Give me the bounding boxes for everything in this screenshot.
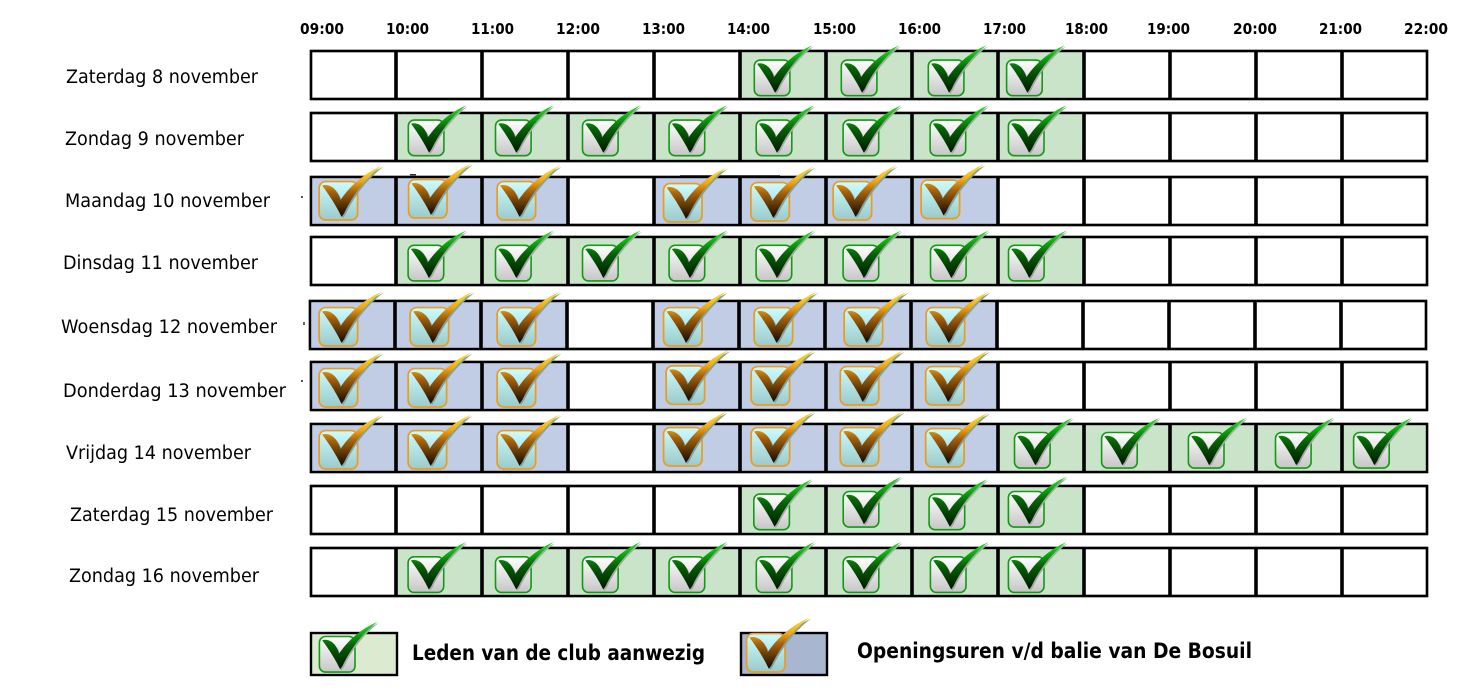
check icons: [319, 292, 990, 346]
hour axis labels: 14:00: [727, 20, 770, 38]
row: Zondag 9 november: [65, 105, 1427, 162]
check icons: [319, 412, 1413, 469]
hour axis labels: 21:00: [1319, 20, 1362, 38]
row: Dinsdag 11 november: [63, 230, 1427, 286]
legend: desk opening hours: [741, 618, 1252, 675]
hour axis labels: 20:00: [1233, 20, 1277, 38]
hour axis labels: 12:00: [556, 20, 600, 38]
row: Woensdag 12 november: Woensdag 12 november: [61, 317, 277, 338]
hour axis labels: 18:00: [1065, 20, 1108, 38]
row: Zondag 16 november: [69, 542, 1427, 597]
row: Woensdag 12 november: [61, 292, 1426, 350]
check icons: [319, 164, 985, 222]
legend: desk opening hours: Openingsuren v/d balie van De Bosuil: [857, 639, 1252, 663]
hour axis labels: 17:00: [983, 20, 1026, 38]
check icons: [319, 350, 990, 407]
row: Donderdag 13 november: [63, 350, 1427, 411]
hour axis labels: 13:00: [642, 20, 685, 38]
check icons: [754, 45, 1066, 96]
row: Maandag 10 november: [65, 164, 1427, 226]
hour axis labels: 11:00: [471, 20, 514, 38]
row: Zaterdag 15 november: [70, 477, 1427, 535]
hour axis labels: 16:00: [898, 20, 941, 38]
row: Zaterdag 8 november: [66, 45, 1427, 100]
check icons: [408, 230, 1068, 281]
hour axis labels: 10:00: [386, 20, 429, 38]
row: Maandag 10 november: Maandag 10 november: [65, 191, 270, 212]
hour axis labels: 22:00: [1404, 20, 1448, 38]
hour axis labels: [300, 20, 1448, 38]
legend: club members present: [311, 622, 705, 675]
row: Zaterdag 15 november: Zaterdag 15 november: [70, 505, 273, 526]
legend: club members present: Leden van de club aanwezig: [412, 641, 705, 665]
row: Donderdag 13 november: Donderdag 13 november: [63, 381, 286, 402]
hour axis labels: 15:00: [813, 20, 856, 38]
check icons: [754, 477, 1068, 530]
row: Zondag 16 november: Zondag 16 november: [69, 566, 259, 587]
row: Zaterdag 8 november: Zaterdag 8 november: [66, 67, 258, 88]
hour axis labels: 19:00: [1147, 20, 1190, 38]
hour axis labels: 09:00: [300, 20, 344, 38]
row: Zondag 9 november: Zondag 9 november: [65, 129, 244, 150]
check icons: [408, 105, 1068, 156]
row: Vrijdag 14 november: Vrijdag 14 november: [66, 443, 251, 464]
row: Vrijdag 14 november: [66, 412, 1427, 473]
check icons: [408, 542, 1068, 592]
row: Dinsdag 11 november: Dinsdag 11 november: [63, 253, 258, 274]
